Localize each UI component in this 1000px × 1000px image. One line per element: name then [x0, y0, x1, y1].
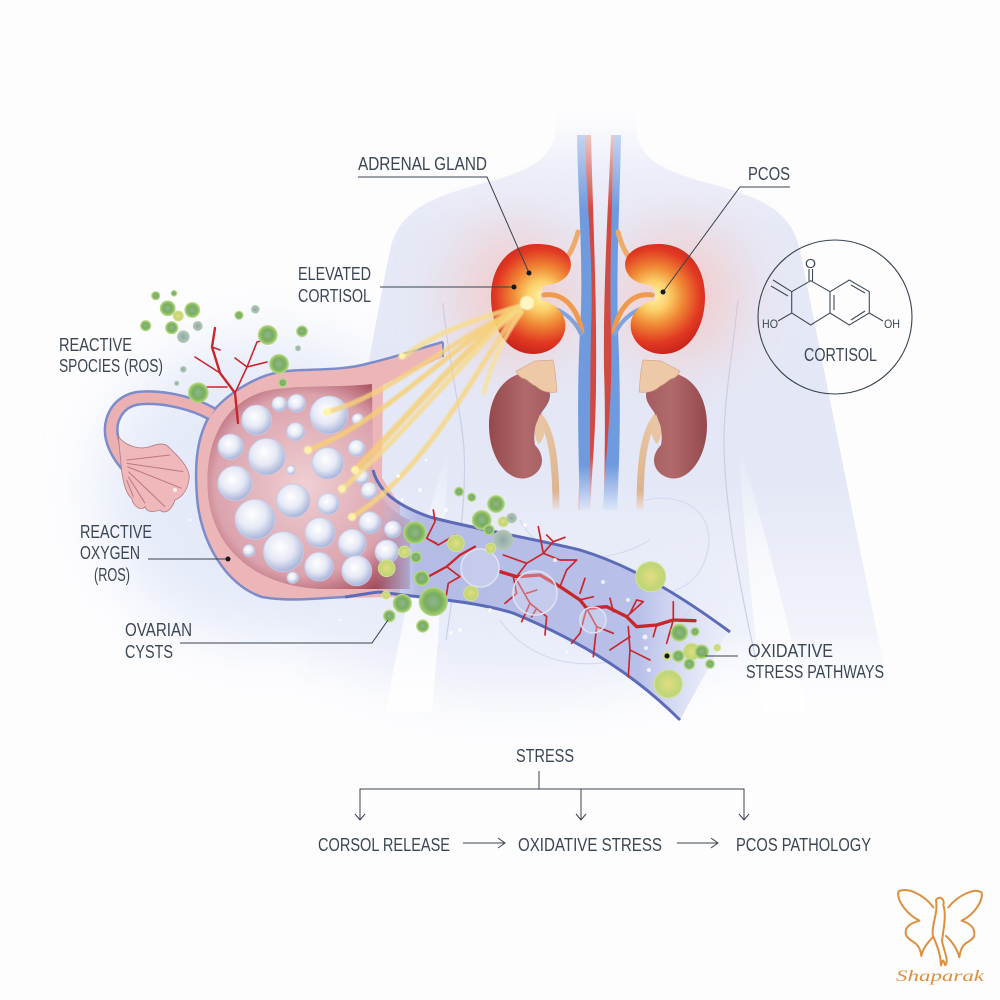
label: reactive oxygen: REACTIVE	[80, 522, 152, 542]
left vein	[577, 135, 592, 510]
renal branches and upper vessels	[544, 232, 652, 334]
ovarian cysts	[218, 394, 401, 586]
flowchart: stress pathway	[318, 746, 871, 855]
label: elevated cortisol: CORTISOL	[298, 286, 371, 306]
label: reactive species	[59, 335, 163, 376]
cortisol molecule callout	[758, 240, 912, 394]
right vein	[603, 135, 621, 510]
green ROS particles right	[636, 562, 721, 698]
left kidney with cap and ureter	[489, 360, 557, 510]
cortisol molecule callout: OH	[884, 317, 900, 331]
label: reactive oxygen: OXYGEN	[80, 543, 140, 563]
label: elevated cortisol	[298, 264, 516, 306]
label: reactive species: REACTIVE	[59, 335, 132, 355]
label: reactive oxygen	[80, 522, 230, 585]
label: oxidative stress pathways: STRESS PATHWAYS	[746, 662, 884, 682]
red glow behind adrenal glands	[453, 227, 742, 363]
ovary wall	[196, 342, 443, 599]
label: elevated cortisol: ELEVATED	[298, 264, 371, 284]
right artery	[604, 135, 619, 510]
label: oxidative stress pathways	[664, 641, 884, 682]
label: adrenal gland	[358, 154, 532, 276]
label: PCOS	[660, 164, 790, 294]
flowchart: stress pathway: OXIDATIVE STRESS	[518, 835, 662, 855]
label: ovarian cysts: OVARIAN	[125, 620, 192, 640]
yellow cortisol rays	[304, 296, 534, 521]
logo: Shaparak butterfly: Shaparak	[896, 968, 985, 985]
blue haze around ovary and tube	[100, 340, 730, 685]
cortisol molecule callout: CORTISOL	[804, 345, 877, 365]
blue tube band	[345, 470, 730, 720]
cortisol molecule callout: O	[805, 256, 816, 271]
right kidney with cap and ureter	[639, 360, 707, 510]
left artery	[578, 135, 596, 510]
label: reactive species: SPOCIES (ROS)	[59, 356, 163, 376]
white sparkle dots	[173, 458, 651, 672]
tube red blood vessels	[427, 510, 695, 677]
flowchart: stress pathway: STRESS	[516, 746, 574, 766]
label: oxidative stress pathways: OXIDATIVE	[748, 641, 833, 661]
fallopian tube and fimbriae	[111, 398, 212, 512]
label: ovarian cysts: CYSTS	[125, 642, 173, 662]
human body silhouette	[296, 110, 895, 712]
ovary cavity	[207, 384, 410, 589]
flowchart: stress pathway: PCOS PATHOLOGY	[736, 835, 871, 855]
ovary surface blood vessels	[195, 328, 268, 423]
label: PCOS: PCOS	[748, 164, 790, 184]
pelvis faint outlines	[500, 498, 709, 664]
green ROS particles middle	[378, 487, 517, 632]
cortisol molecule callout: HO	[762, 317, 778, 331]
arm gap right	[738, 440, 806, 712]
flowchart: stress pathway: CORSOL RELEASE	[318, 835, 450, 855]
label: reactive oxygen: (ROS)	[94, 565, 130, 585]
adrenal gland left (red organ)	[491, 244, 571, 354]
label: ovarian cysts	[125, 620, 388, 662]
torso contour lines	[443, 300, 756, 660]
arm gap left	[386, 440, 450, 712]
central blood vessels	[577, 135, 621, 510]
logo: Shaparak butterfly	[896, 890, 985, 985]
translucent cysts in tube	[461, 549, 606, 633]
label: adrenal gland: ADRENAL GLAND	[358, 154, 487, 174]
green ROS particles top	[141, 291, 307, 402]
adrenal gland right (red organ)	[625, 244, 705, 354]
